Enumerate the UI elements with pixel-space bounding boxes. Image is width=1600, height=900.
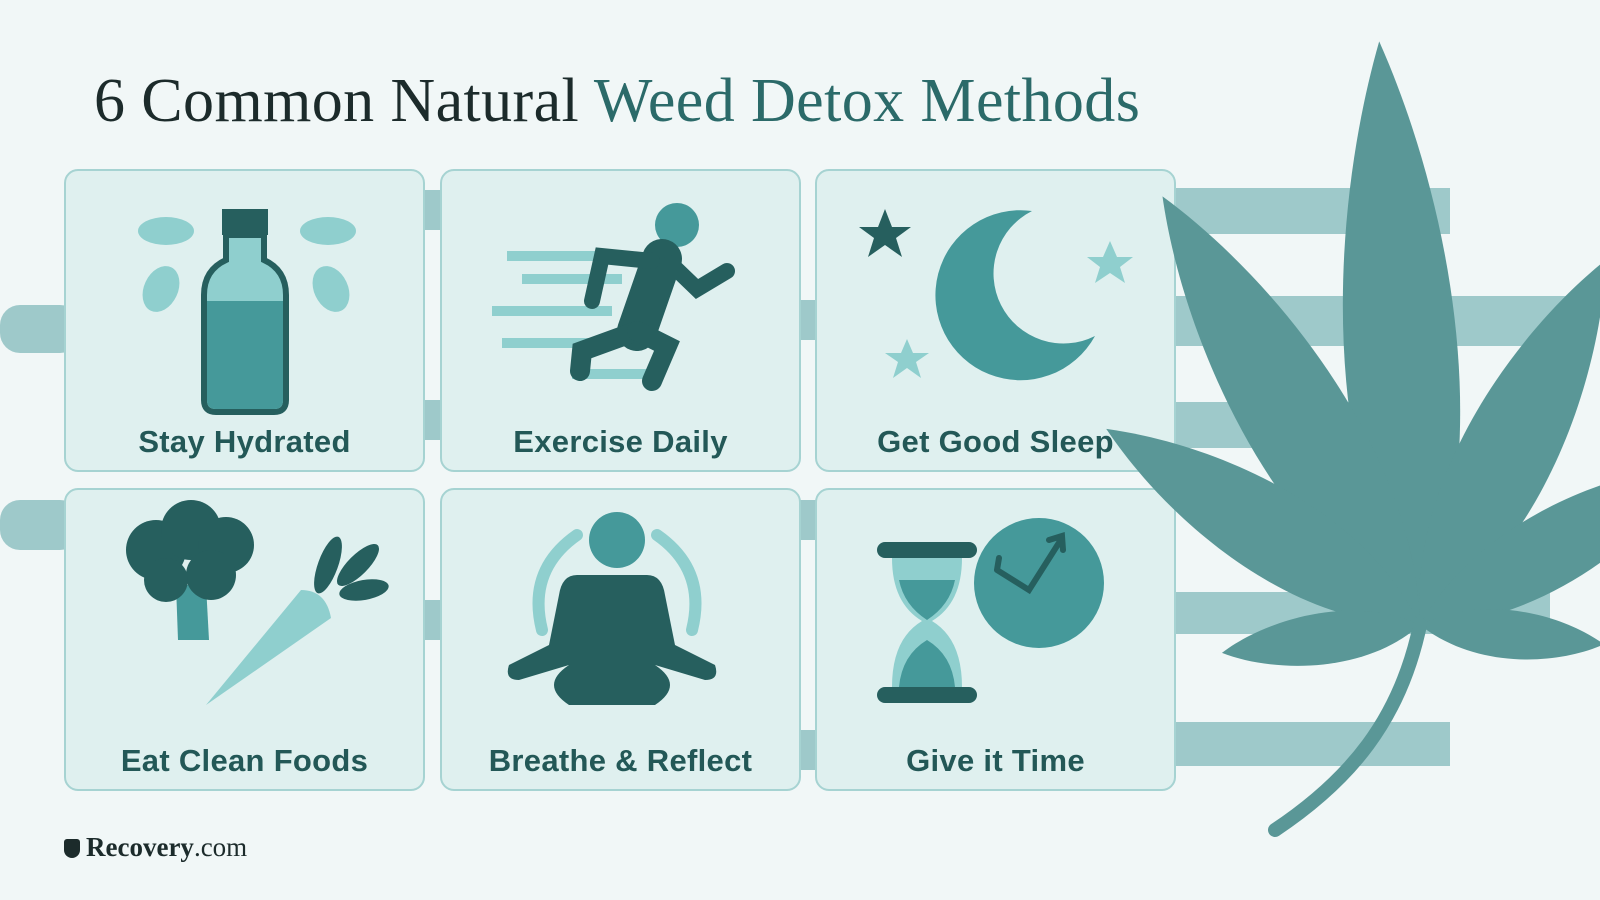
card: Give it Time: [815, 488, 1176, 791]
card: Eat Clean Foods: [64, 488, 425, 791]
card: Breathe & Reflect: Breathe & Reflect: [489, 743, 752, 778]
logo: Recovery.com: [86, 832, 247, 862]
card: Give it Time: Give it Time: [906, 743, 1085, 778]
card: Stay Hydrated: Stay Hydrated: [138, 424, 351, 459]
card: Exercise Daily: Exercise Daily: [513, 424, 728, 459]
title: 6 Common Natural Weed Detox Methods: [94, 67, 1140, 135]
card: Stay Hydrated: [64, 169, 425, 472]
card: Get Good Sleep: Get Good Sleep: [877, 424, 1114, 459]
card: Exercise Daily: [440, 169, 801, 472]
card: Get Good Sleep: [815, 169, 1176, 472]
card: Eat Clean Foods: Eat Clean Foods: [121, 743, 368, 778]
card: Breathe & Reflect: [440, 488, 801, 791]
